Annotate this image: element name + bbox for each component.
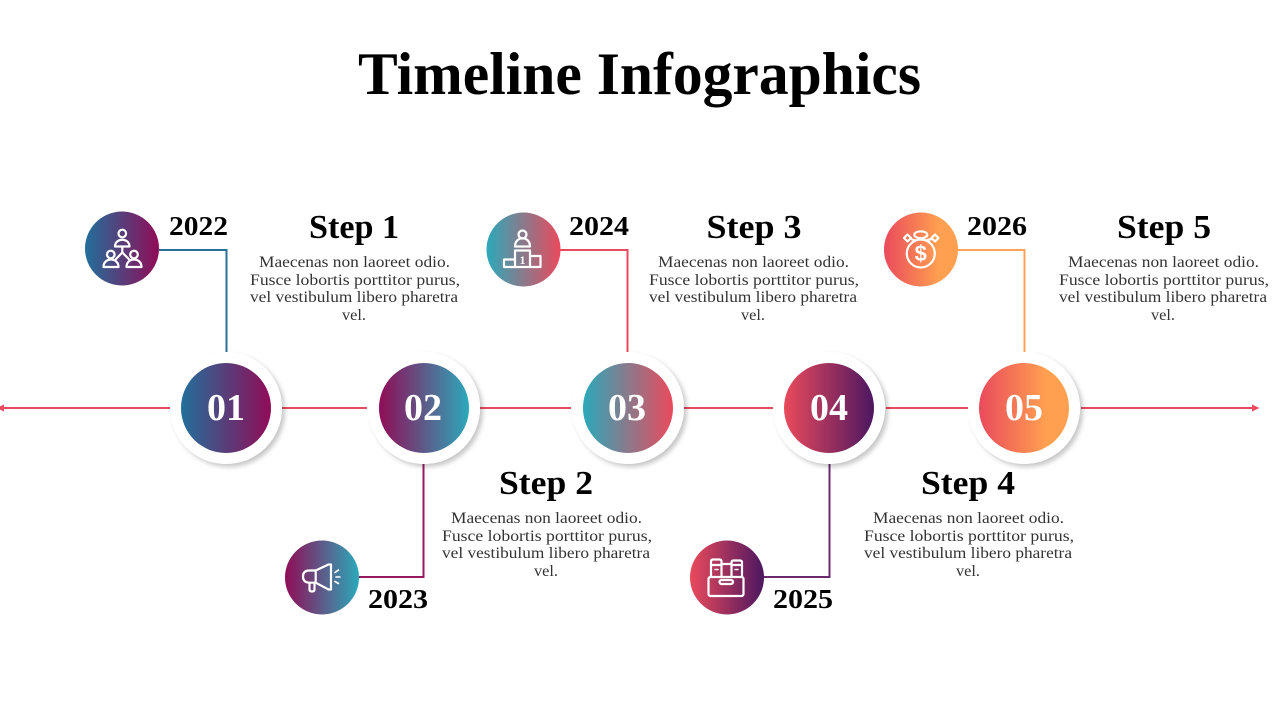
node 03 — [572, 352, 684, 464]
text block: step 5 — [1059, 209, 1269, 324]
text block: step 2: Step 2 — [499, 465, 593, 502]
connector: 2022 to step 01 — [159, 250, 226, 352]
text block: step 4: vel. — [956, 563, 980, 580]
node 05: 05 — [1005, 387, 1043, 429]
text block: step 2: Fusce lobortis porttitor purus, — [442, 528, 652, 545]
text block: step 3 — [649, 209, 859, 324]
node 04: 04 — [810, 387, 848, 429]
icon: megaphone — [285, 540, 359, 614]
node 05 — [968, 352, 1080, 464]
text block: step 2: vel vestibulum libero pharetra — [442, 545, 650, 562]
year 2026: 2026 — [967, 211, 1027, 241]
text block: step 5: Step 5 — [1117, 209, 1211, 246]
icon: money bag: $ — [915, 241, 927, 266]
text block: step 1: Step 1 — [309, 209, 399, 246]
text block: step 2: Maecenas non laoreet odio. — [451, 510, 642, 527]
year 2024: 2024 — [569, 211, 629, 241]
node 01: 01 — [207, 387, 245, 429]
icon: storage box — [690, 540, 764, 614]
node 02: 02 — [404, 387, 442, 429]
text block: step 5: Maecenas non laoreet odio. — [1068, 254, 1259, 271]
title: Timeline Infographics — [358, 41, 921, 107]
connector: 2024 to step 03 — [560, 250, 628, 352]
year 2025: 2025 — [773, 584, 833, 614]
text block: step 4: Maecenas non laoreet odio. — [873, 510, 1064, 527]
text block: step 3: vel vestibulum libero pharetra — [649, 289, 857, 306]
text block: step 3: Fusce lobortis porttitor purus, — [649, 272, 859, 289]
node 03: 03 — [608, 387, 646, 429]
text block: step 5: vel vestibulum libero pharetra — [1059, 289, 1267, 306]
text block: step 4 — [864, 465, 1074, 580]
text block: step 5: Fusce lobortis porttitor purus, — [1059, 272, 1269, 289]
connector: 2026 to step 05 — [958, 250, 1024, 352]
text block: step 5: vel. — [1151, 307, 1175, 324]
text block: step 1: Fusce lobortis porttitor purus, — [250, 272, 460, 289]
text block: step 1: Maecenas non laoreet odio. — [259, 254, 450, 271]
text block: step 3: Maecenas non laoreet odio. — [658, 254, 849, 271]
text block: step 2: vel. — [534, 563, 558, 580]
text block: step 2 — [442, 465, 652, 580]
connector: 2025 to step 04 — [763, 464, 830, 577]
icon: podium — [486, 212, 560, 286]
text block: step 1: vel vestibulum libero pharetra — [250, 289, 458, 306]
icon: money bag — [884, 212, 958, 286]
icon: people hierarchy — [85, 212, 159, 286]
text block: step 3: vel. — [741, 307, 765, 324]
text block: step 4: Step 4 — [921, 465, 1015, 502]
node 04 — [773, 352, 885, 464]
timeline arrow — [0, 404, 1260, 412]
year 2022: 2022 — [169, 211, 228, 241]
text block: step 4: vel vestibulum libero pharetra — [864, 545, 1072, 562]
connector: 2023 to step 02 — [359, 464, 424, 577]
text block: step 1: vel. — [342, 307, 366, 324]
icon: podium: 1 — [520, 253, 526, 267]
text block: step 4: Fusce lobortis porttitor purus, — [864, 528, 1074, 545]
text block: step 1 — [250, 209, 460, 324]
node 01 — [170, 352, 282, 464]
node 02 — [368, 352, 480, 464]
text block: step 3: Step 3 — [706, 209, 802, 246]
year 2023: 2023 — [368, 584, 428, 614]
